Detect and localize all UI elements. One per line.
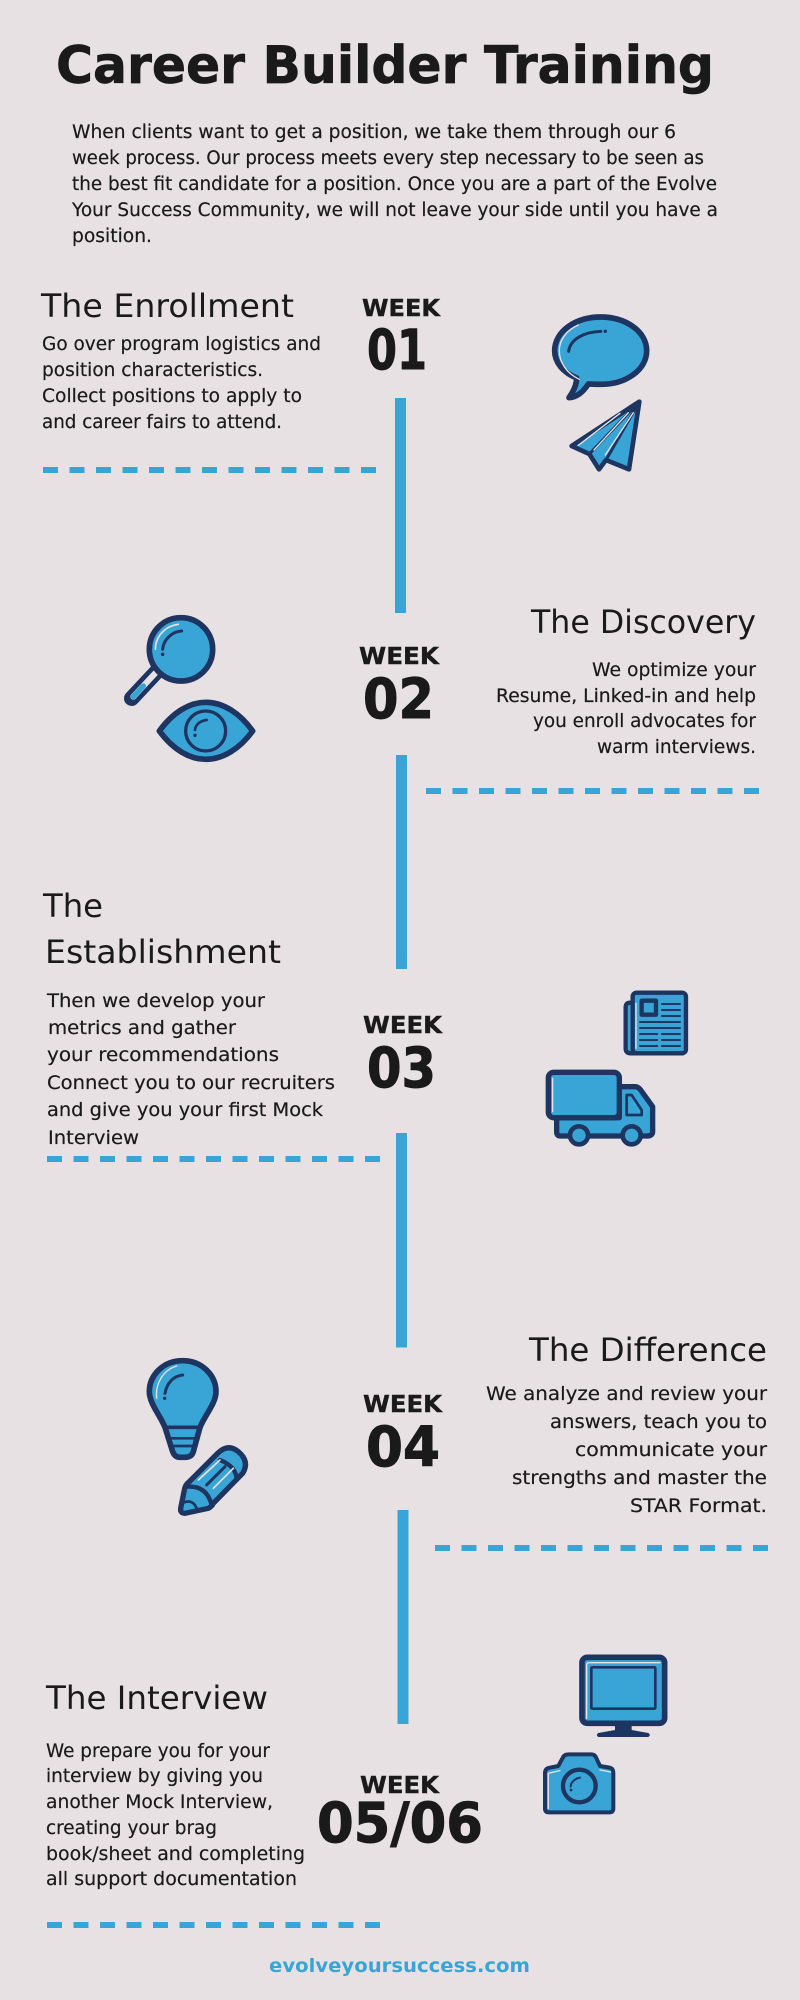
intro text block	[71, 122, 718, 247]
text block: enrollment description: position characteristics.	[42, 359, 263, 381]
text block: enrollment description: Collect positions to apply to	[42, 385, 302, 407]
icon: speech bubble	[555, 317, 647, 398]
week label 05/06: 05/06	[317, 1791, 483, 1855]
text block: establishment description: Interview	[48, 1127, 139, 1149]
week label 03	[363, 1013, 443, 1100]
text block: enrollment description: Go over program logistics and	[42, 333, 321, 355]
dashed connector	[426, 788, 760, 794]
text block: establishment description: Then we develop your	[46, 990, 265, 1012]
week label 03: WEEK	[363, 1013, 443, 1039]
dashed connector	[47, 1156, 381, 1162]
week label 02: 02	[363, 667, 434, 731]
footer url: evolveyoursuccess.com	[269, 1955, 530, 1977]
text block: interview description: another Mock Interview,	[46, 1791, 273, 1813]
heading: the difference: The Difference	[528, 1331, 767, 1369]
week label 05/06: WEEK	[360, 1773, 440, 1799]
icon: magnifying glass	[132, 618, 213, 698]
panel: week 01 the enrollment	[40, 287, 647, 613]
icon: delivery truck	[548, 1072, 653, 1144]
week label 02: WEEK	[359, 644, 440, 670]
text block: interview description: We prepare you for your	[46, 1740, 270, 1762]
text block: difference description: answers, teach you to	[550, 1411, 767, 1433]
icon: camera	[545, 1754, 613, 1812]
timeline bar	[396, 1133, 407, 1348]
week label 04: 04	[366, 1415, 440, 1479]
week label 02	[359, 644, 440, 731]
dashed connector	[43, 467, 377, 473]
intro text block: When clients want to get a position, we take them through our 6	[72, 122, 676, 143]
icon: pencil	[181, 1448, 245, 1513]
intro text block: position.	[72, 226, 152, 247]
week label 03: 03	[367, 1036, 436, 1100]
text block: establishment description: Connect you to our recruiters	[47, 1072, 335, 1094]
text block: interview description	[46, 1740, 305, 1890]
text block: interview description: all support documentation	[46, 1868, 297, 1890]
text block: difference description: strengths and master the	[512, 1467, 767, 1489]
panel: week 02 the discovery	[132, 603, 760, 969]
intro text block: the best fit candidate for a position. Once you are a part of the Evolve	[72, 174, 717, 195]
text block: establishment description	[46, 990, 335, 1149]
heading: the establishment: The	[42, 887, 103, 925]
text block: enrollment description	[42, 333, 321, 433]
text block: difference description: We analyze and review your	[486, 1383, 767, 1405]
text block: difference description: STAR Format.	[630, 1495, 767, 1517]
text block: discovery description	[496, 659, 756, 758]
week label 04: WEEK	[363, 1392, 443, 1418]
text block: establishment description: and give you your first Mock	[47, 1099, 323, 1121]
text block: enrollment description: and career fairs to attend.	[42, 411, 282, 433]
text block: establishment description: your recommendations	[47, 1044, 279, 1066]
text block: discovery description: you enroll advocates for	[533, 710, 756, 732]
intro text block: week process. Our process meets every step necessary to be seen as	[72, 148, 704, 169]
icon: computer monitor	[582, 1657, 665, 1737]
heading: the interview: The Interview	[45, 1679, 268, 1717]
text block: interview description: interview by giving you	[46, 1765, 263, 1787]
heading: the enrollment: The Enrollment	[40, 287, 294, 325]
icon: newspaper	[626, 993, 686, 1053]
heading: the discovery: The Discovery	[530, 603, 756, 641]
text block: interview description: book/sheet and completing	[46, 1843, 305, 1865]
heading: the establishment: Establishment	[45, 933, 281, 971]
text block: discovery description: We optimize your	[592, 659, 756, 681]
dashed connector	[435, 1545, 769, 1551]
intro text block: Your Success Community, we will not leave your side until you have a	[71, 200, 718, 221]
text block: establishment description: metrics and gather	[48, 1017, 236, 1039]
text block: discovery description: warm interviews.	[597, 736, 756, 758]
timeline bar	[396, 755, 407, 969]
title: Career Builder Training	[56, 36, 714, 96]
text block: interview description: creating your brag	[46, 1817, 217, 1839]
week label 01: WEEK	[362, 296, 441, 322]
heading: the establishment	[42, 887, 281, 971]
timeline bar	[395, 398, 406, 613]
icon: light bulb	[149, 1361, 216, 1457]
week label 01	[362, 296, 441, 382]
text block: difference description: communicate your	[575, 1439, 767, 1461]
timeline bar	[398, 1510, 408, 1724]
icon: eye	[159, 702, 253, 759]
icon: paper plane	[572, 402, 639, 469]
text block: difference description	[486, 1383, 767, 1517]
panel: week 03 the establishment	[42, 887, 686, 1348]
week label 01: 01	[367, 318, 427, 382]
text block: discovery description: Resume, Linked-in and help	[496, 685, 756, 707]
panel: week 05/06 the interview	[45, 1657, 665, 1925]
dashed connector	[47, 1922, 381, 1928]
panel: week 04 the difference	[149, 1331, 769, 1724]
